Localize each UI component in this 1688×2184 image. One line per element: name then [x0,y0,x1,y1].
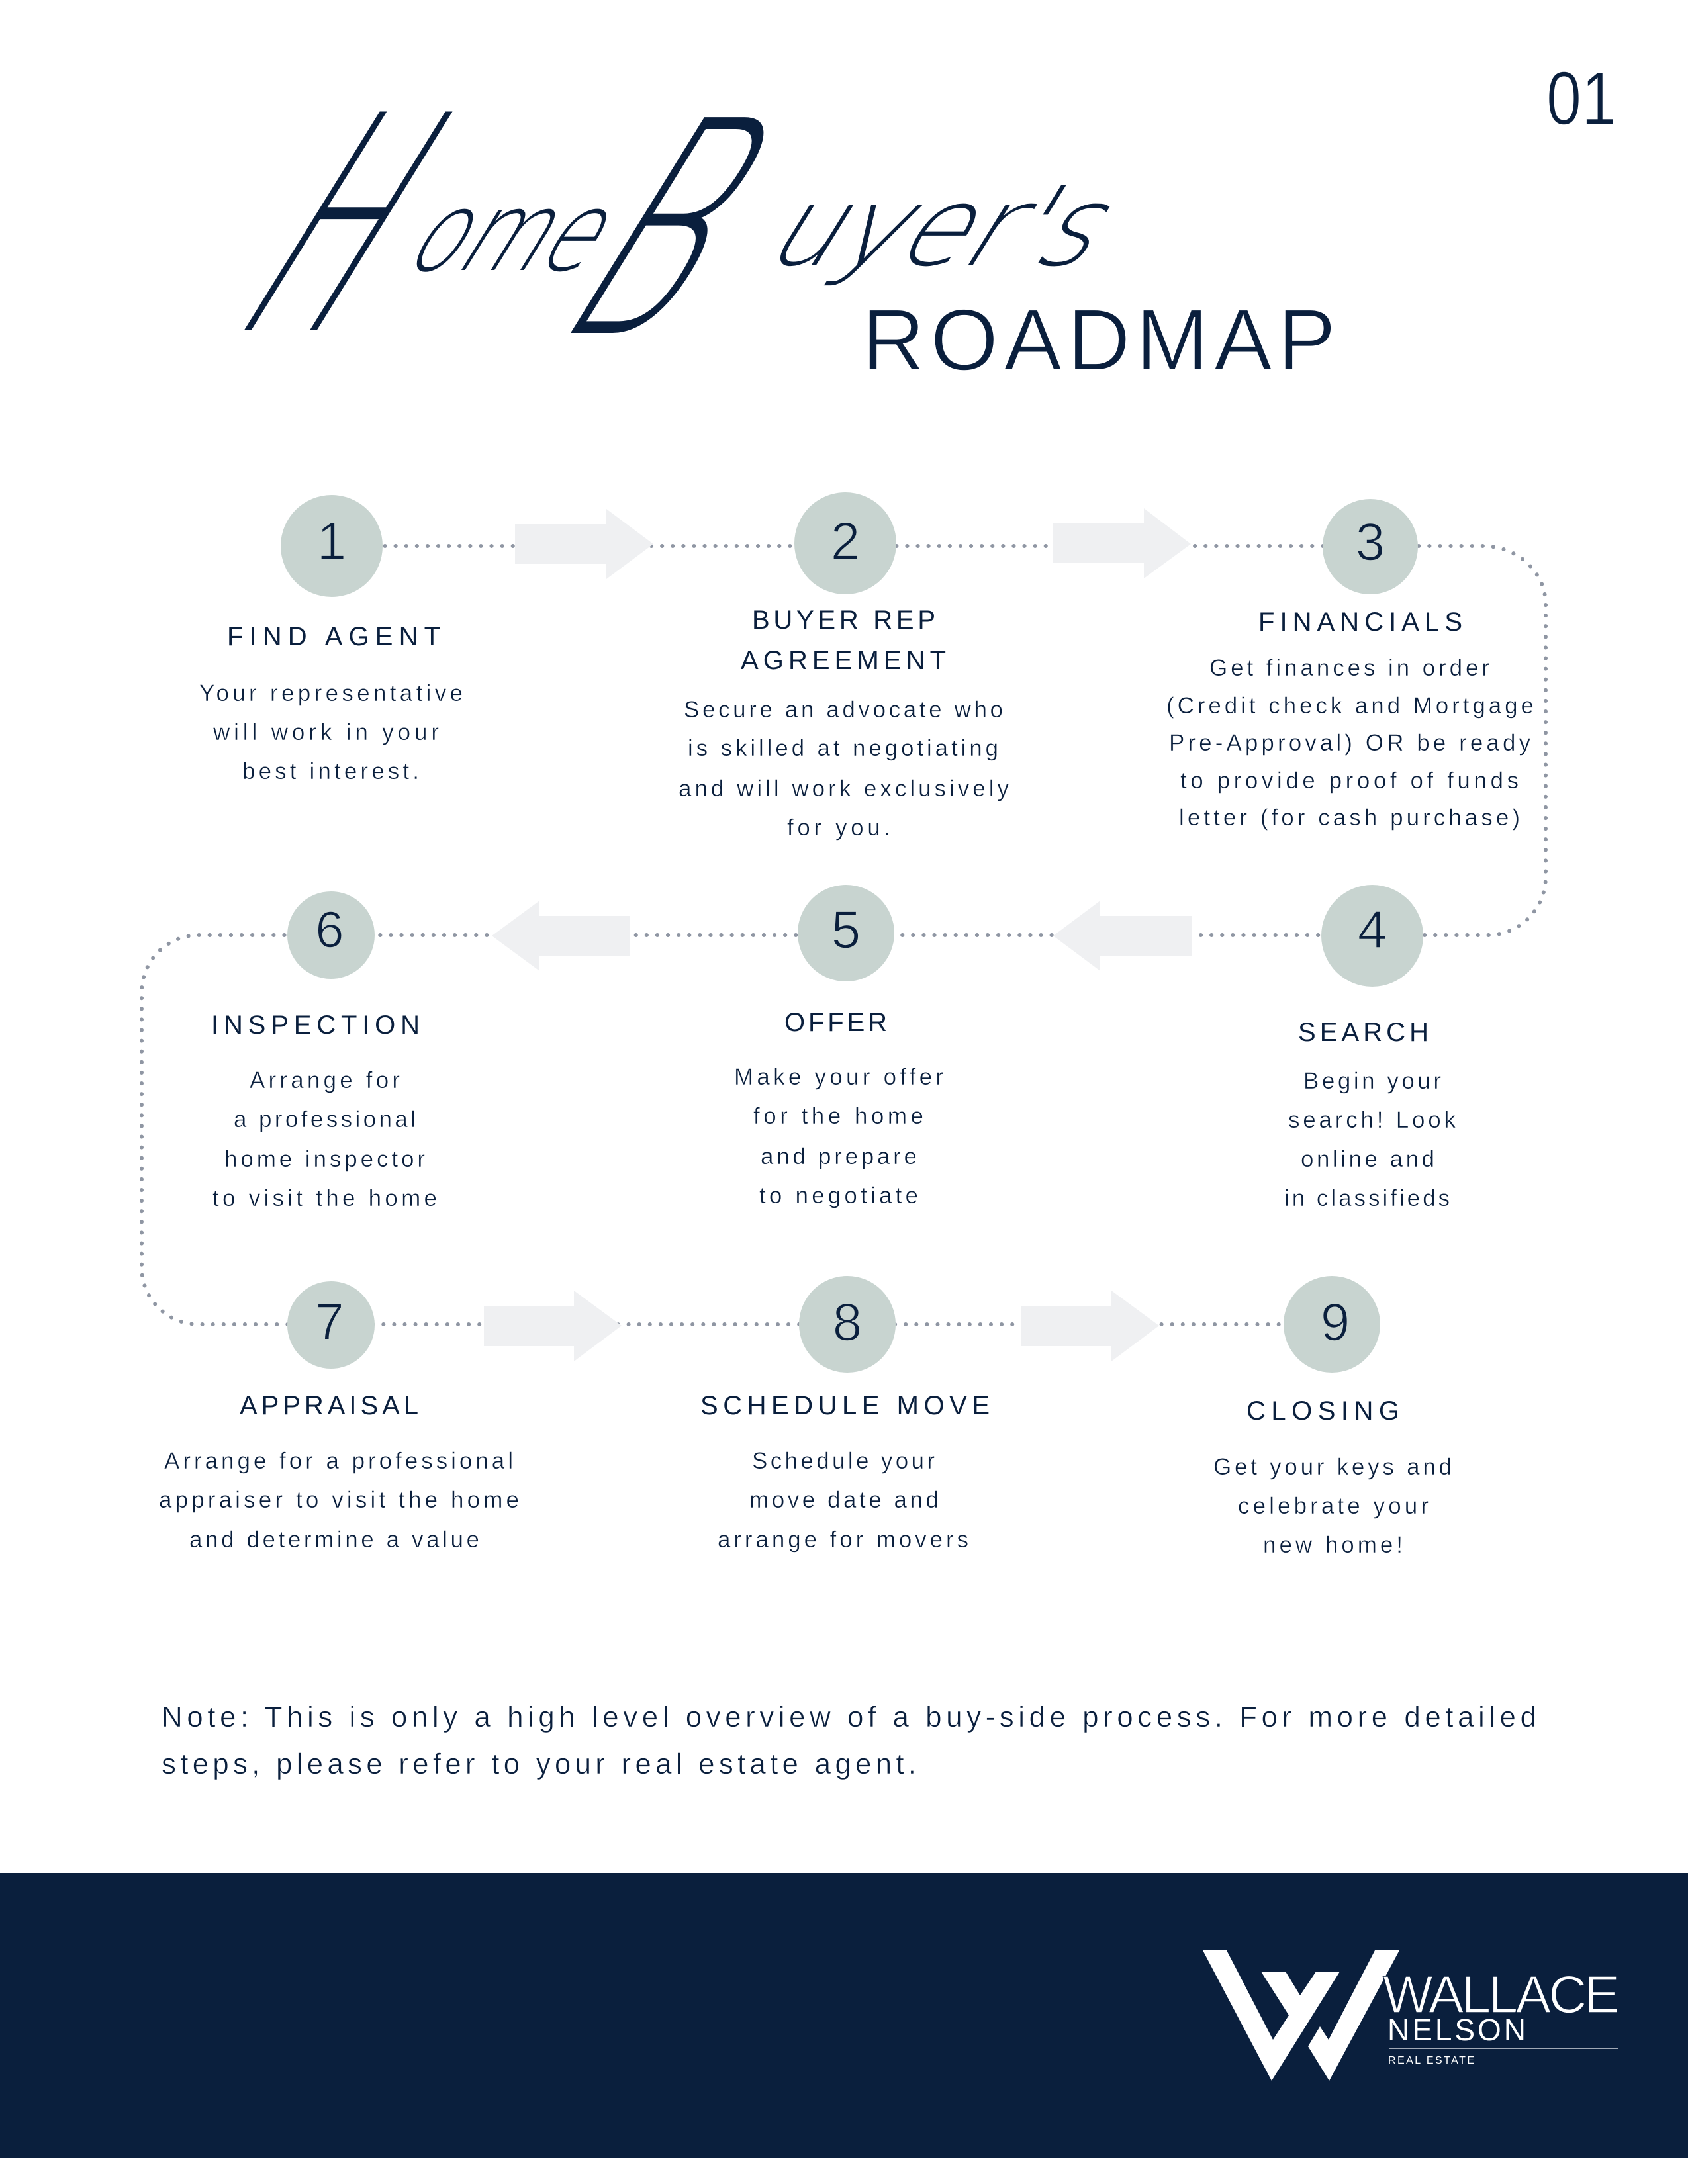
step 8: schedule move [700,1276,990,1553]
circle 8: 8 [833,1293,862,1351]
description [199,680,463,784]
description: Get your keys and [1213,1454,1452,1480]
arrow 8 to 9 [1021,1291,1159,1361]
description: new home! [1263,1532,1403,1558]
description: best interest. [242,758,419,784]
description: Your representative [199,680,463,706]
description: a professional [234,1107,416,1132]
circle 3: 3 [1356,512,1385,571]
circle 7 [287,1281,375,1369]
description: Arrange for a professional [164,1448,513,1474]
description [212,1068,437,1211]
circle 7: 7 [315,1293,344,1351]
logo mark [1203,1950,1399,2081]
circle 6: 6 [315,900,344,958]
description [734,1064,943,1208]
note [162,1701,1536,1780]
circle 2: 2 [831,512,860,570]
circle 4 [1321,885,1423,987]
heading: FIND AGENT [227,622,440,651]
description: Get finances in order [1209,655,1489,681]
heading: SEARCH [1298,1018,1429,1047]
description: home inspector [224,1146,425,1172]
description: Pre-Approval) OR be ready [1169,730,1530,756]
circle 3 [1323,499,1418,594]
step 5: offer [734,885,943,1208]
arrow 4 to 5 [1053,901,1192,971]
description [1166,655,1534,831]
description: celebrate your [1238,1493,1429,1519]
description [679,697,1009,841]
step 4: search [1284,885,1456,1211]
description [1213,1454,1452,1558]
script title: HomeBuyer's: uyer's [745,163,1147,291]
description: will work in your [212,719,439,745]
dotted route line [142,546,1546,1324]
circle 1: 1 [317,512,346,570]
heading [741,606,946,675]
description: Secure an advocate who [684,697,1003,723]
page number: 01 [1546,57,1617,141]
step 6: inspection [211,891,437,1211]
step 2: buyer rep agreement [679,492,1009,841]
note: Note: This is only a high level overview of a buy-side process. For more detailed [162,1701,1536,1733]
heading: AGREEMENT [741,646,946,675]
arrow 7 to 8 [484,1291,622,1361]
circle 2 [794,492,896,594]
logo wordmark: REAL ESTATE [1388,2055,1474,2066]
circle 8 [799,1276,896,1373]
description: to provide proof of funds [1180,768,1519,794]
description: is skilled at negotiating [688,735,998,761]
script title: HomeBuyer's: B [505,60,835,403]
arrow 1 to 2 [515,509,653,579]
heading: OFFER [784,1008,887,1037]
step 1: find agent [199,495,463,784]
description: to visit the home [212,1185,437,1211]
description: and determine a value [189,1527,479,1553]
description: search! Look [1288,1107,1456,1133]
circle 1 [281,495,383,597]
description [159,1448,519,1553]
circle 4: 4 [1358,900,1387,959]
arrow 2 to 3 [1053,508,1191,578]
step 3: financials [1166,499,1534,831]
description [718,1448,968,1553]
description: for you. [787,815,890,841]
description [1284,1068,1456,1211]
circle 6 [287,891,375,979]
logo [1203,1950,1620,2081]
description: Begin your [1303,1068,1441,1094]
description: move date and [749,1487,939,1513]
description: arrange for movers [718,1527,968,1553]
title [183,52,1336,403]
logo wordmark: NELSON [1387,2013,1526,2047]
heading: BUYER REP [752,606,935,635]
note: steps, please refer to your real estate agent. [162,1748,916,1780]
logo wordmark [1383,1965,1620,2066]
footer band [0,1873,1688,2158]
script title: HomeBuyer's: H [183,52,507,400]
heading: FINANCIALS [1258,608,1462,637]
script title: HomeBuyer's: ome [385,169,647,296]
heading: CLOSING [1246,1396,1399,1426]
step 7: appraisal [159,1281,519,1553]
description: letter (for cash purchase) [1179,805,1520,831]
heading: INSPECTION [211,1011,420,1040]
description: Make your offer [734,1064,943,1090]
description: online and [1301,1146,1434,1172]
circle 9 [1284,1276,1380,1373]
circle 5: 5 [831,900,861,959]
description: Arrange for [250,1068,400,1093]
description: and will work exclusively [679,776,1009,801]
description: Schedule your [752,1448,935,1474]
circle 9: 9 [1321,1293,1350,1351]
arrow 5 to 6 [492,901,630,971]
step 9: closing [1213,1276,1452,1558]
circle 5 [798,885,894,981]
description: for the home [753,1103,923,1129]
logo wordmark: WALLACE [1383,1965,1620,2024]
description: in classifieds [1284,1185,1450,1211]
description: (Credit check and Mortgage [1166,693,1534,719]
title: ROADMAP: ROADMAP [862,291,1336,388]
description: appraiser to visit the home [159,1487,519,1513]
description: and prepare [761,1144,917,1169]
heading: APPRAISAL [240,1391,418,1420]
heading: SCHEDULE MOVE [700,1391,990,1420]
description: to negotiate [759,1183,918,1208]
script title: HomeBuyer's [183,52,1147,403]
